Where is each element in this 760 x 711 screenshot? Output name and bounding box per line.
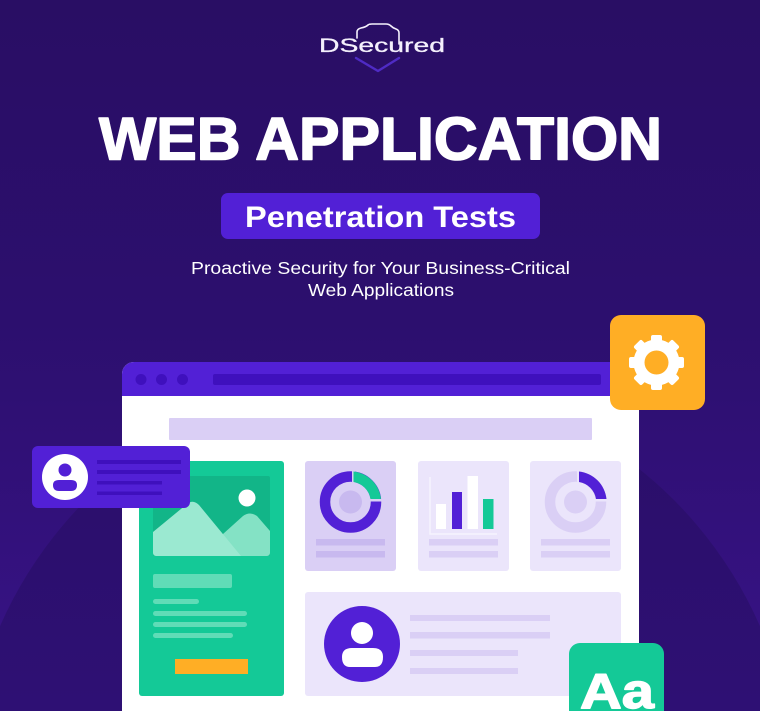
browser window — [122, 362, 639, 711]
tagline — [191, 258, 570, 300]
icon card: user profile — [32, 446, 190, 508]
logo: DSecured — [319, 24, 445, 71]
panel: green image card — [139, 461, 284, 696]
search bar — [169, 418, 592, 440]
icon: gear — [629, 335, 684, 390]
icon: shield outline — [356, 24, 399, 71]
subtitle badge: Penetration Tests — [245, 201, 516, 234]
panel: donut chart purple — [530, 461, 621, 571]
logo wordmark: DSecured — [319, 36, 445, 57]
panel: profile card — [305, 592, 621, 696]
panel: donut chart green — [305, 461, 396, 571]
title: WEB APPLICATION — [99, 105, 662, 172]
browser title bar — [122, 362, 639, 396]
icon card: typography — [569, 643, 664, 711]
panel: bar chart — [418, 461, 509, 571]
tagline: Proactive Security for Your Business-Critical — [191, 258, 570, 278]
tagline: Web Applications — [308, 280, 454, 300]
icon card: gear — [610, 315, 705, 410]
subtitle badge — [221, 193, 540, 239]
